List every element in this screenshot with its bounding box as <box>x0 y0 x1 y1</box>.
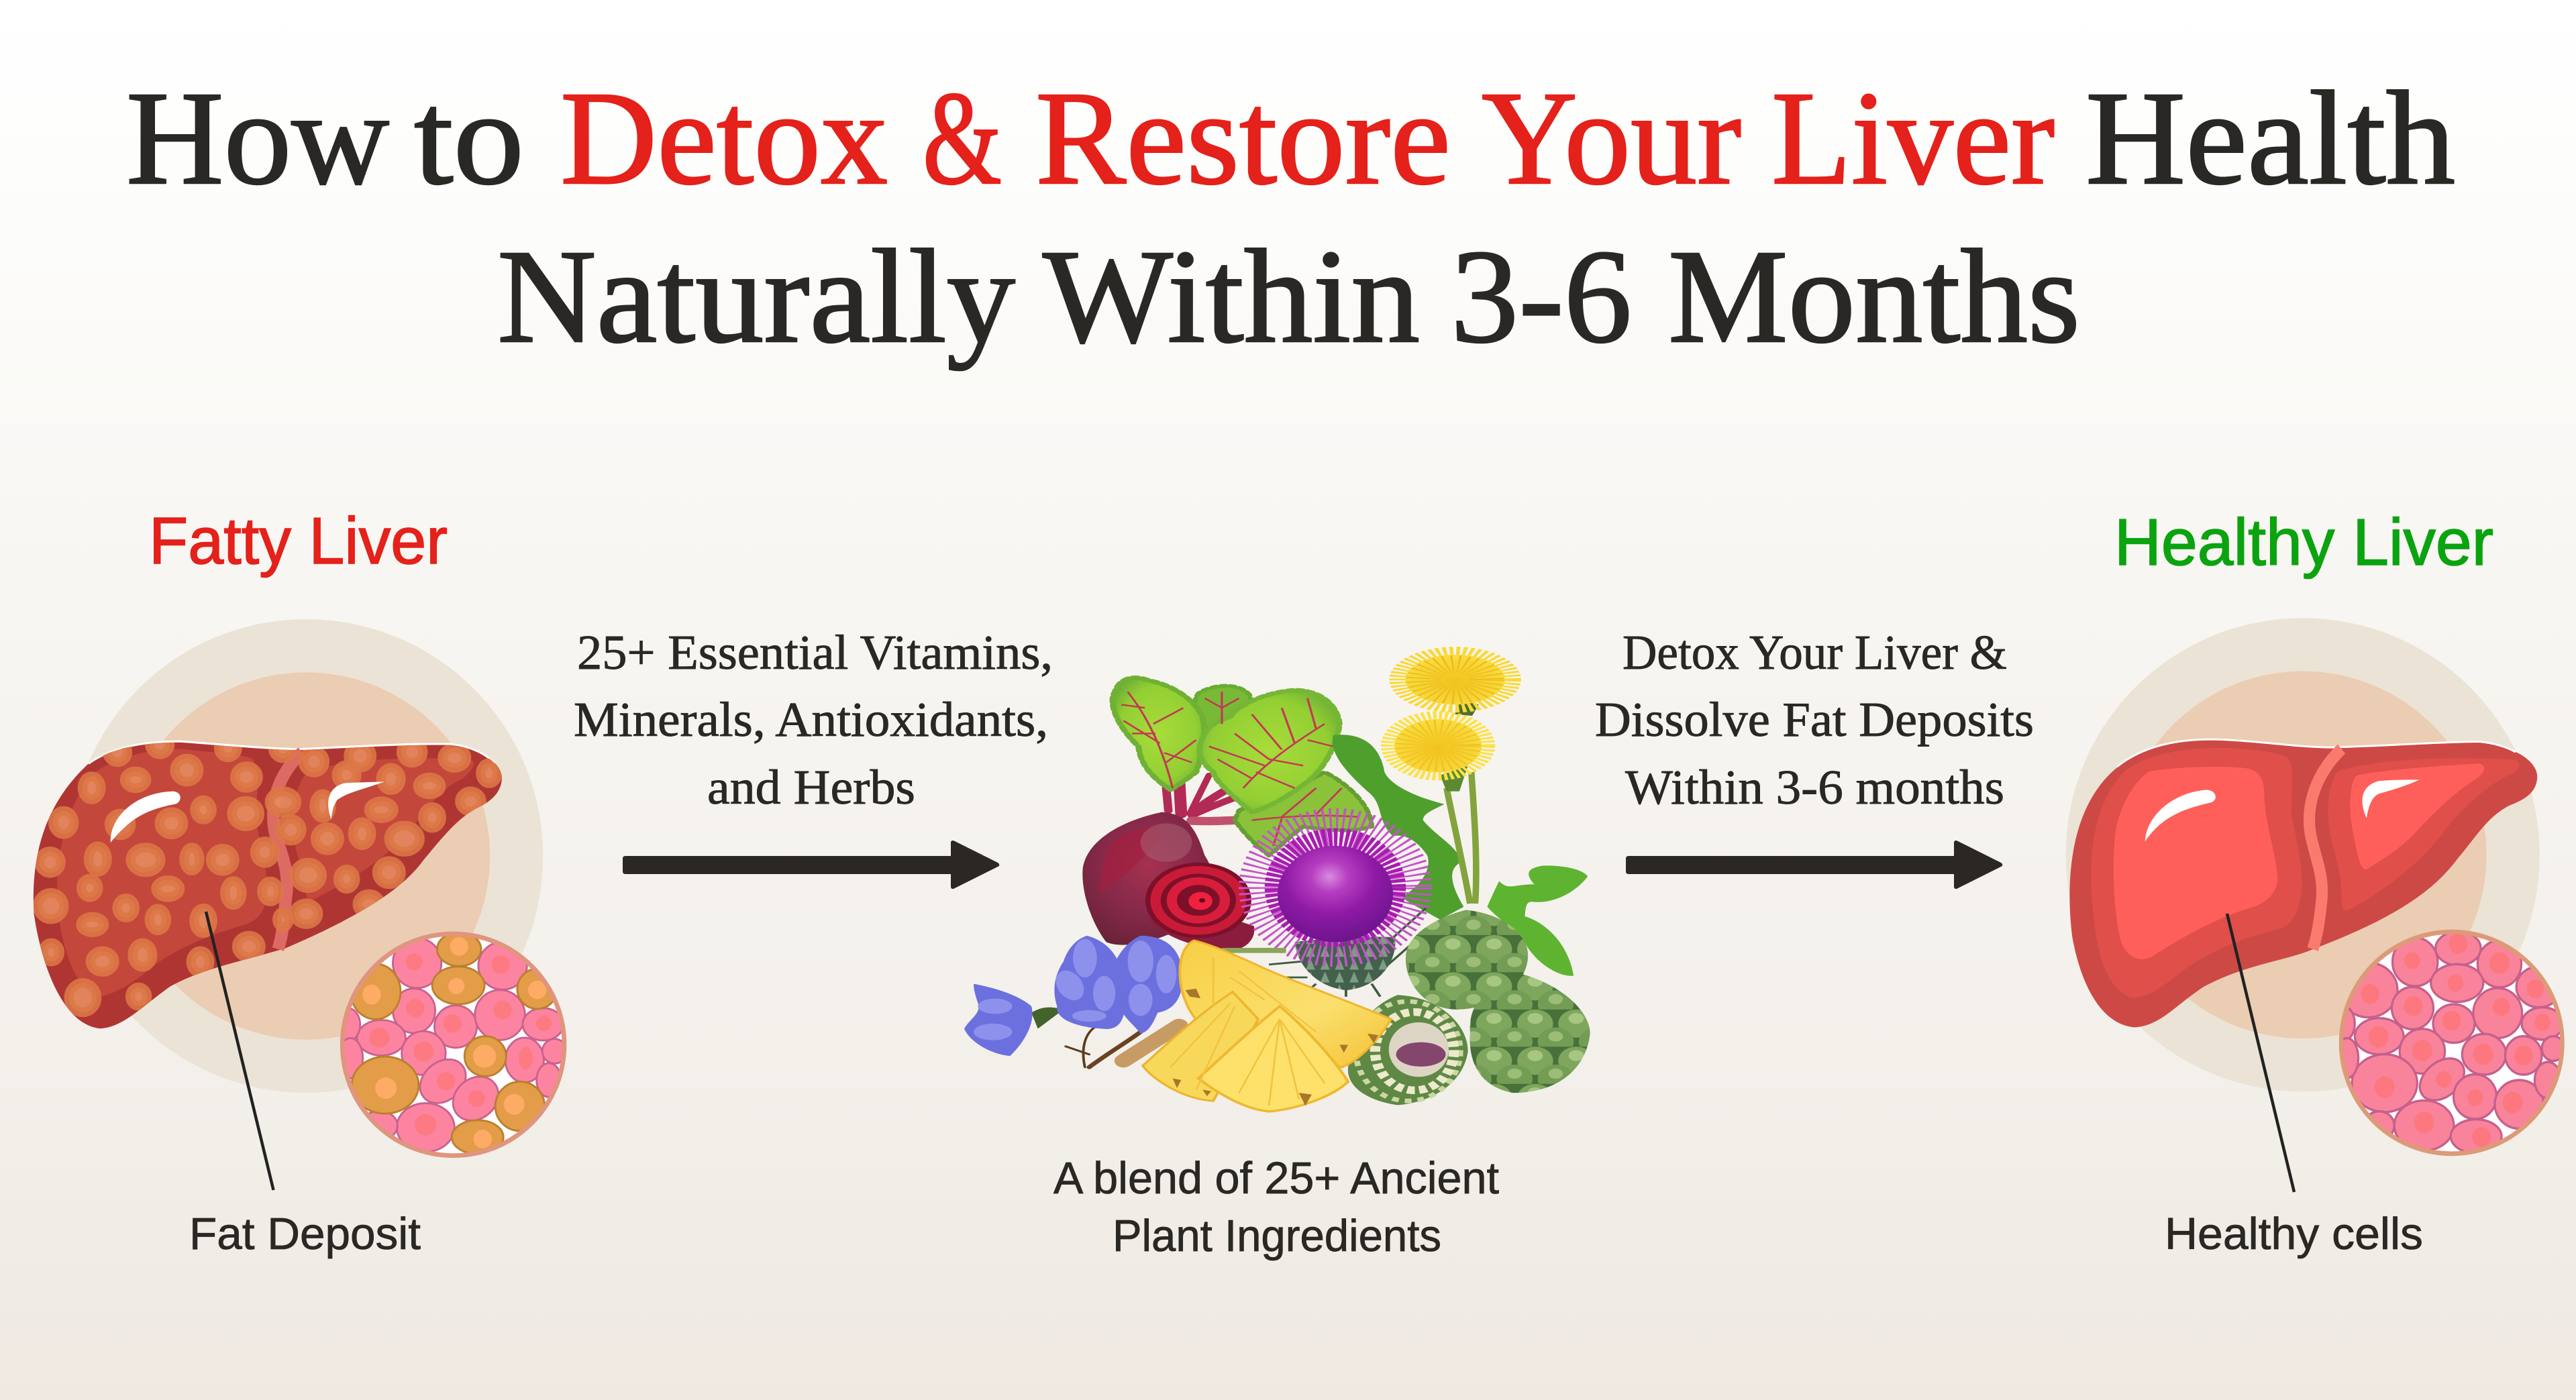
caption: plant blend: Plant Ingredients <box>1113 1211 1441 1261</box>
arrow: left to centre <box>623 841 999 889</box>
icon: fatty liver <box>34 735 502 1028</box>
text block: vitamins and herbs: and Herbs <box>707 760 915 814</box>
title: Within <box>1043 223 1420 371</box>
title: Liver <box>1771 64 2055 213</box>
icon: milk thistle <box>1222 832 1427 997</box>
text block: detox your liver: Detox Your Liver & <box>1622 625 2007 680</box>
title: & <box>923 64 1002 213</box>
text block: vitamins and herbs: Minerals, Antioxidants, <box>574 692 1048 747</box>
icon: sliced beet <box>1145 863 1254 950</box>
title: Health <box>2085 64 2455 213</box>
panel: plant ingredients <box>964 653 1590 1112</box>
leader line: fat deposit <box>206 912 274 1190</box>
text block: detox your liver: Within 3-6 months <box>1625 760 2004 814</box>
text block: detox your liver: Dissolve Fat Deposits <box>1595 692 2034 747</box>
icon: cut artichoke <box>1348 995 1468 1105</box>
label: Fat Deposit: Fat Deposit <box>189 1209 421 1259</box>
backdrop circles <box>2066 618 2540 1091</box>
title: to <box>414 64 524 213</box>
text block: vitamins and herbs <box>574 625 1053 814</box>
icon: lower artichoke <box>1470 971 1590 1093</box>
label: Healthy cells: Healthy cells <box>2165 1209 2423 1259</box>
title: Restore <box>1035 64 1451 213</box>
icon: upper artichoke <box>1406 910 1528 1010</box>
title: 3-6 <box>1451 223 1632 371</box>
heading: Fatty Liver: Fatty Liver <box>149 504 448 578</box>
title: Months <box>1668 223 2080 371</box>
inset: healthy liver cells <box>2335 932 2565 1154</box>
text block: detox your liver <box>1595 625 2034 814</box>
leader line: healthy cells <box>2227 914 2294 1192</box>
inset: fat-laden liver cells <box>337 932 567 1156</box>
title <box>126 64 2455 371</box>
title: Naturally <box>497 223 1015 371</box>
icon: pineapple wedges <box>1143 940 1391 1112</box>
title: Detox <box>560 64 888 213</box>
icon: chicory roots <box>1066 1026 1179 1067</box>
heading: Healthy Liver: Healthy Liver <box>2114 505 2493 579</box>
title: How <box>126 64 389 213</box>
icon: beet leaves <box>1113 678 1372 855</box>
backdrop circles <box>69 619 543 1093</box>
icon: arugula leaf <box>1487 865 1588 976</box>
icon: chicory flowers <box>964 936 1183 1056</box>
icon: whole beet <box>1082 812 1215 945</box>
icon: dandelion flowers <box>1390 653 1509 904</box>
panel: healthy liver illustration <box>2066 618 2565 1154</box>
icon: dandelion leaf <box>1333 735 1463 920</box>
icon: beet stems <box>1166 772 1256 821</box>
caption: plant blend: A blend of 25+ Ancient <box>1053 1153 1499 1203</box>
arrow: centre to right <box>1626 841 2002 889</box>
panel: fatty liver illustration <box>34 619 567 1156</box>
caption: plant blend <box>1053 1153 1499 1261</box>
icon: healthy liver <box>2069 739 2537 1027</box>
title: Your <box>1482 64 1741 213</box>
text block: vitamins and herbs: 25+ Essential Vitamins, <box>577 625 1053 680</box>
